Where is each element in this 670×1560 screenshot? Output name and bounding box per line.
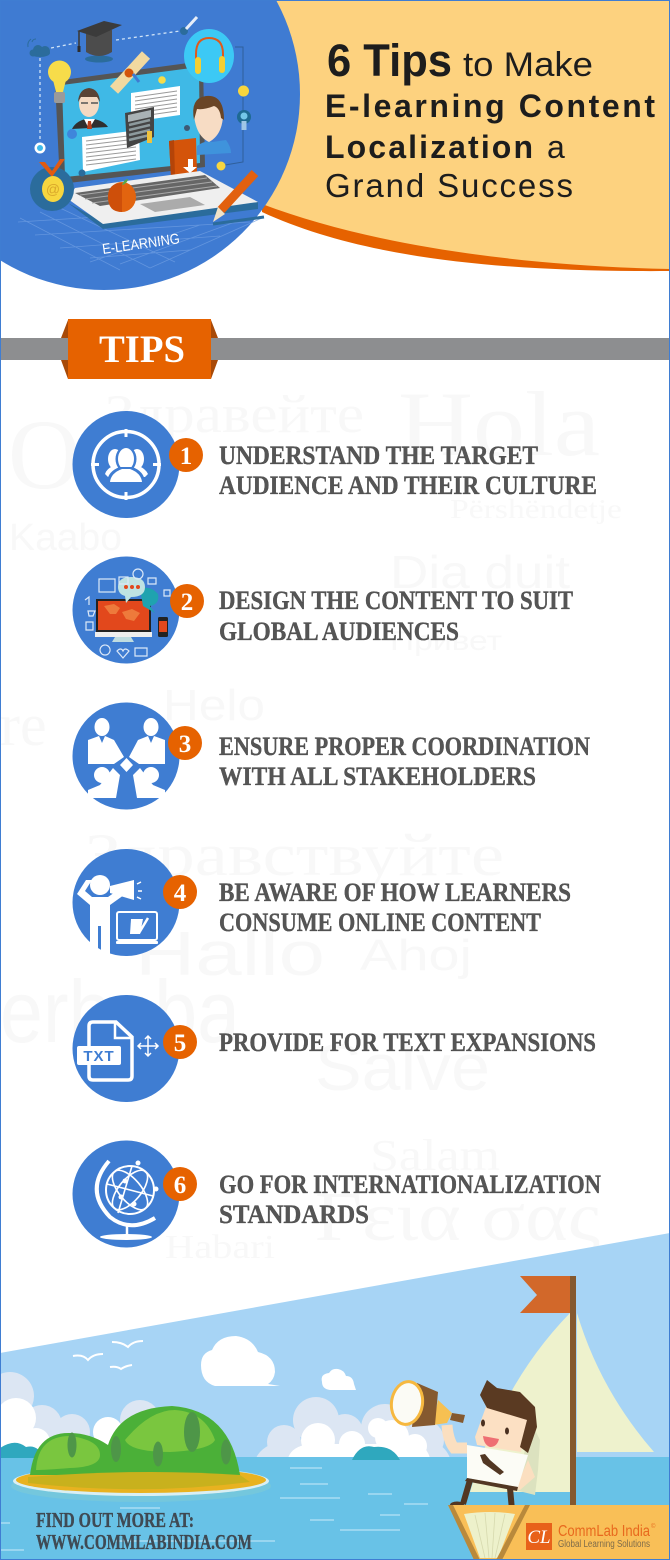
footer call to action: FIND OUT MORE AT: bbox=[36, 1508, 194, 1532]
background: faint multilingual greetings: Salve bbox=[315, 1030, 490, 1104]
icon: txt file with expand arrows bbox=[72, 995, 180, 1102]
headphones in circle bbox=[184, 29, 234, 83]
professor bbox=[72, 88, 108, 129]
icon: global content monitor bbox=[72, 556, 180, 664]
tip 3 bbox=[72, 702, 590, 810]
title: to Make bbox=[463, 46, 593, 84]
tip 6 text: STANDARDS bbox=[219, 1200, 369, 1229]
logo: CommLab India: Global Learning Solutions bbox=[558, 1539, 650, 1550]
logo: CommLab India: CL bbox=[527, 1527, 551, 1548]
tip 4 text: BE AWARE OF HOW LEARNERS bbox=[219, 878, 571, 907]
man with spyglass bbox=[387, 1378, 540, 1516]
icon: pencil tip top right bbox=[180, 17, 197, 35]
tip 4 text: CONSUME ONLINE CONTENT bbox=[219, 908, 541, 937]
tip 3 text: WITH ALL STAKEHOLDERS bbox=[219, 762, 536, 791]
background: faint multilingual greetings: Ahoj bbox=[360, 931, 472, 980]
title: 6 Tips bbox=[327, 35, 452, 86]
background: faint multilingual greetings: Përshëndetje bbox=[450, 494, 622, 524]
background: faint multilingual greetings: Γεια σας bbox=[315, 1179, 600, 1256]
tip 1 text: AUDIENCE AND THEIR CULTURE bbox=[219, 471, 597, 500]
apple bbox=[108, 179, 136, 212]
logo: CommLab India bbox=[526, 1523, 656, 1550]
background: faint multilingual greetings: Здравейте bbox=[104, 384, 364, 444]
tip 5 bbox=[72, 995, 596, 1102]
tip 3 text bbox=[219, 732, 590, 791]
tip 2 bbox=[72, 556, 573, 664]
tip 6 bbox=[72, 1140, 601, 1248]
tip 5 text: PROVIDE FOR TEXT EXPANSIONS bbox=[219, 1028, 596, 1057]
number badge 4 bbox=[163, 875, 197, 909]
icon: txt file with expand arrows: TXT bbox=[83, 1048, 115, 1065]
arm at side bbox=[512, 1460, 535, 1490]
medal: @ bbox=[46, 181, 60, 197]
logo: CommLab India: CommLab India bbox=[558, 1523, 650, 1540]
number badge 5: 5 bbox=[174, 1030, 186, 1057]
tip 6 text: GO FOR INTERNATIONALIZATION bbox=[219, 1170, 601, 1199]
background: faint multilingual greetings: Привет bbox=[390, 625, 502, 656]
right-side dots and small bulb bbox=[216, 47, 251, 170]
sea bbox=[0, 1457, 670, 1560]
background: faint multilingual greetings: Habari bbox=[165, 1229, 275, 1266]
section heading: tips banner bbox=[0, 319, 670, 379]
calculator bbox=[125, 107, 154, 148]
number badge 6: 6 bbox=[174, 1172, 186, 1199]
number badge 6 bbox=[163, 1167, 197, 1201]
header: blue circle with e-learning illustration bbox=[0, 0, 300, 290]
tip 1 text bbox=[219, 441, 597, 500]
tip 3 text: ENSURE PROPER COORDINATION bbox=[219, 732, 590, 761]
tip 2 text bbox=[219, 586, 573, 646]
logo: CommLab India: © bbox=[651, 1523, 656, 1530]
background: faint multilingual greetings: O bbox=[8, 399, 80, 510]
pencil bbox=[213, 173, 264, 224]
number badge 3: 3 bbox=[179, 731, 191, 758]
icon: stakeholders bbox=[72, 702, 180, 810]
birds bbox=[73, 1341, 143, 1369]
icon: light bulb bbox=[48, 60, 71, 103]
tip 2 text: DESIGN THE CONTENT TO SUIT bbox=[219, 586, 573, 615]
diploma bbox=[114, 55, 146, 90]
icon: cloud and connectors bbox=[28, 31, 187, 154]
tip 2 text: GLOBAL AUDIENCES bbox=[219, 617, 459, 646]
icon: person with megaphone and laptop bbox=[72, 849, 180, 956]
number badge 4: 4 bbox=[174, 880, 187, 907]
footer scene: sky bbox=[0, 1233, 670, 1460]
footer call to action: WWW.COMMLABINDIA.COM bbox=[36, 1530, 252, 1554]
title: Grand Success bbox=[325, 167, 573, 204]
background: faint multilingual greetings: Salam bbox=[370, 1131, 500, 1180]
number badge 1 bbox=[169, 438, 203, 472]
e-learning caption: E-LEARNING bbox=[101, 231, 181, 258]
boat hull with book bbox=[448, 1505, 670, 1560]
icon: target audience bbox=[72, 411, 180, 518]
tip 4 text bbox=[219, 878, 571, 937]
tip 1 text: UNDERSTAND THE TARGET bbox=[219, 441, 538, 470]
head bbox=[475, 1404, 529, 1452]
student bbox=[193, 96, 231, 155]
laptop base and keyboard bbox=[68, 171, 258, 229]
medal bbox=[30, 159, 74, 211]
footer call to action bbox=[36, 1508, 252, 1554]
background: faint multilingual greetings: Hola bbox=[398, 373, 600, 475]
tip 6 text bbox=[219, 1170, 601, 1229]
title bbox=[325, 35, 655, 204]
number badge 2: 2 bbox=[181, 589, 193, 616]
background: faint multilingual greetings bbox=[0, 373, 622, 1266]
tip 1 bbox=[72, 411, 597, 518]
spyglass bbox=[450, 1413, 465, 1423]
icon: globe bbox=[72, 1140, 180, 1248]
background: faint multilingual greetings: Helo bbox=[163, 681, 265, 730]
number badge 1: 1 bbox=[180, 443, 192, 470]
title: Localization bbox=[325, 129, 533, 165]
green island bbox=[11, 1406, 271, 1502]
laptop screen bbox=[55, 61, 205, 184]
background: faint multilingual greetings: Hallo bbox=[135, 920, 325, 989]
background: faint multilingual greetings: Kaabo bbox=[9, 517, 122, 559]
number badge 3 bbox=[168, 726, 202, 760]
background: faint multilingual greetings: Здравствуйте bbox=[84, 822, 504, 888]
clouds bbox=[0, 1336, 450, 1460]
title: E-learning Content bbox=[325, 88, 655, 124]
book with download arrow bbox=[169, 138, 197, 177]
title: a bbox=[547, 129, 565, 165]
number badge 5 bbox=[163, 1025, 197, 1059]
icon: graduation cap bbox=[77, 21, 122, 62]
number badge 2 bbox=[170, 584, 204, 618]
floor grid bbox=[18, 208, 262, 270]
background: faint multilingual greetings: erhaba bbox=[0, 962, 240, 1061]
shirt bbox=[467, 1445, 528, 1487]
background: faint multilingual greetings: re bbox=[0, 692, 47, 758]
background: faint multilingual greetings: Dia duit bbox=[390, 546, 570, 598]
distant teal islands bbox=[0, 1443, 400, 1460]
arm raised bbox=[447, 1425, 467, 1448]
tip 4 bbox=[72, 849, 571, 956]
section heading: tips banner: TIPS bbox=[99, 328, 185, 371]
header: yellow title panel bbox=[262, 0, 670, 271]
legs bbox=[463, 1480, 470, 1504]
sailboat sails and flag bbox=[470, 1276, 654, 1506]
